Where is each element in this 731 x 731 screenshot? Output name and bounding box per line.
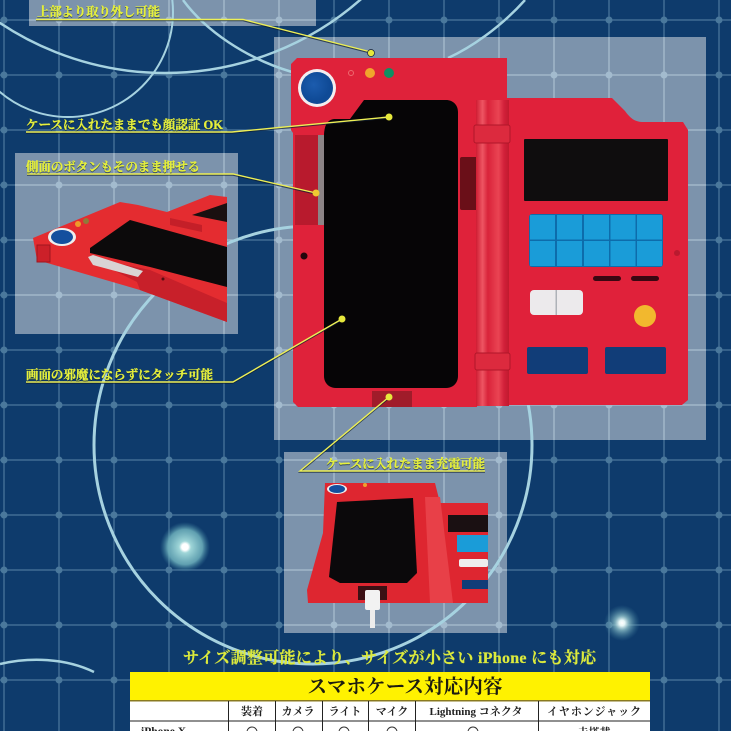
inset photo: charging view [307, 483, 488, 628]
charging cover screen [448, 515, 488, 532]
inset lower face shading [87, 257, 227, 322]
charging hinge strip [425, 497, 453, 603]
table title bar: スマホケース対応内容 [308, 675, 503, 698]
charging cover keys [457, 535, 488, 552]
left rail recess [295, 135, 318, 225]
note heading: サイズ調整可能により、サイズが小さい iPhone にも対応 [183, 648, 598, 667]
callout: charging: ケースに入れたまま充電可能 [326, 456, 485, 471]
table header row: カメラ [282, 705, 314, 718]
yellow round button [634, 305, 656, 327]
table title bar [130, 672, 650, 702]
callout: touch: 画面の邪魔にならずにタッチ可能 [26, 367, 213, 382]
callout: face ID: ケースに入れたままでも顔認証 OK [26, 117, 223, 132]
side hole [300, 252, 308, 260]
table header row: マイク [376, 705, 408, 718]
callout: side buttons [26, 159, 320, 196]
callout: charging [300, 394, 485, 472]
cover screen [524, 139, 668, 201]
inset phone screen [90, 220, 227, 287]
inset cover screen [192, 203, 227, 222]
callout: face ID [26, 114, 392, 133]
charging phone [329, 498, 417, 583]
right cover [505, 98, 688, 405]
inset blue button [48, 228, 76, 246]
inset rear slot [170, 218, 202, 232]
charging blue button [327, 484, 347, 494]
table header row [241, 704, 641, 718]
inset LEDs [75, 218, 89, 227]
background arcs [0, 0, 532, 672]
charging cover white button [459, 559, 488, 567]
callout: touch [26, 316, 346, 383]
hinge [474, 100, 510, 406]
table header row: イヤホンジャック [547, 705, 641, 718]
navy buttons [527, 347, 666, 374]
inset photo: case angled side view [33, 195, 227, 322]
lightning cable [365, 590, 380, 628]
table row: iPhone X [141, 725, 610, 731]
inset phone silver edge [88, 255, 143, 277]
table header row: ライト [329, 705, 361, 718]
callout: removable top: 上部より取り外し可能 [37, 4, 160, 19]
inset screw [162, 278, 164, 280]
bottom connector notch [372, 391, 412, 407]
main device: open red case [291, 58, 688, 407]
table header row: 装着 [241, 704, 263, 718]
compatibility table [130, 672, 650, 731]
inset side button [37, 245, 50, 262]
callout: side buttons: 側面のボタンもそのまま押せる [26, 159, 200, 174]
charging cover navy button [462, 580, 488, 589]
phone [318, 100, 458, 388]
charging connector recess [358, 586, 387, 600]
charging LED [363, 483, 367, 487]
left frame [291, 58, 507, 407]
LEDs [348, 68, 394, 78]
background glow lights [160, 522, 640, 641]
callout: removable top [36, 4, 374, 56]
white buttons [530, 290, 583, 315]
blue key grid [529, 214, 663, 267]
right rail tab [460, 157, 482, 210]
small screw [674, 250, 680, 256]
slits [593, 276, 659, 281]
blue round button [298, 69, 336, 107]
table header row: Lightning コネクタ [430, 705, 522, 718]
table grid [130, 701, 650, 731]
